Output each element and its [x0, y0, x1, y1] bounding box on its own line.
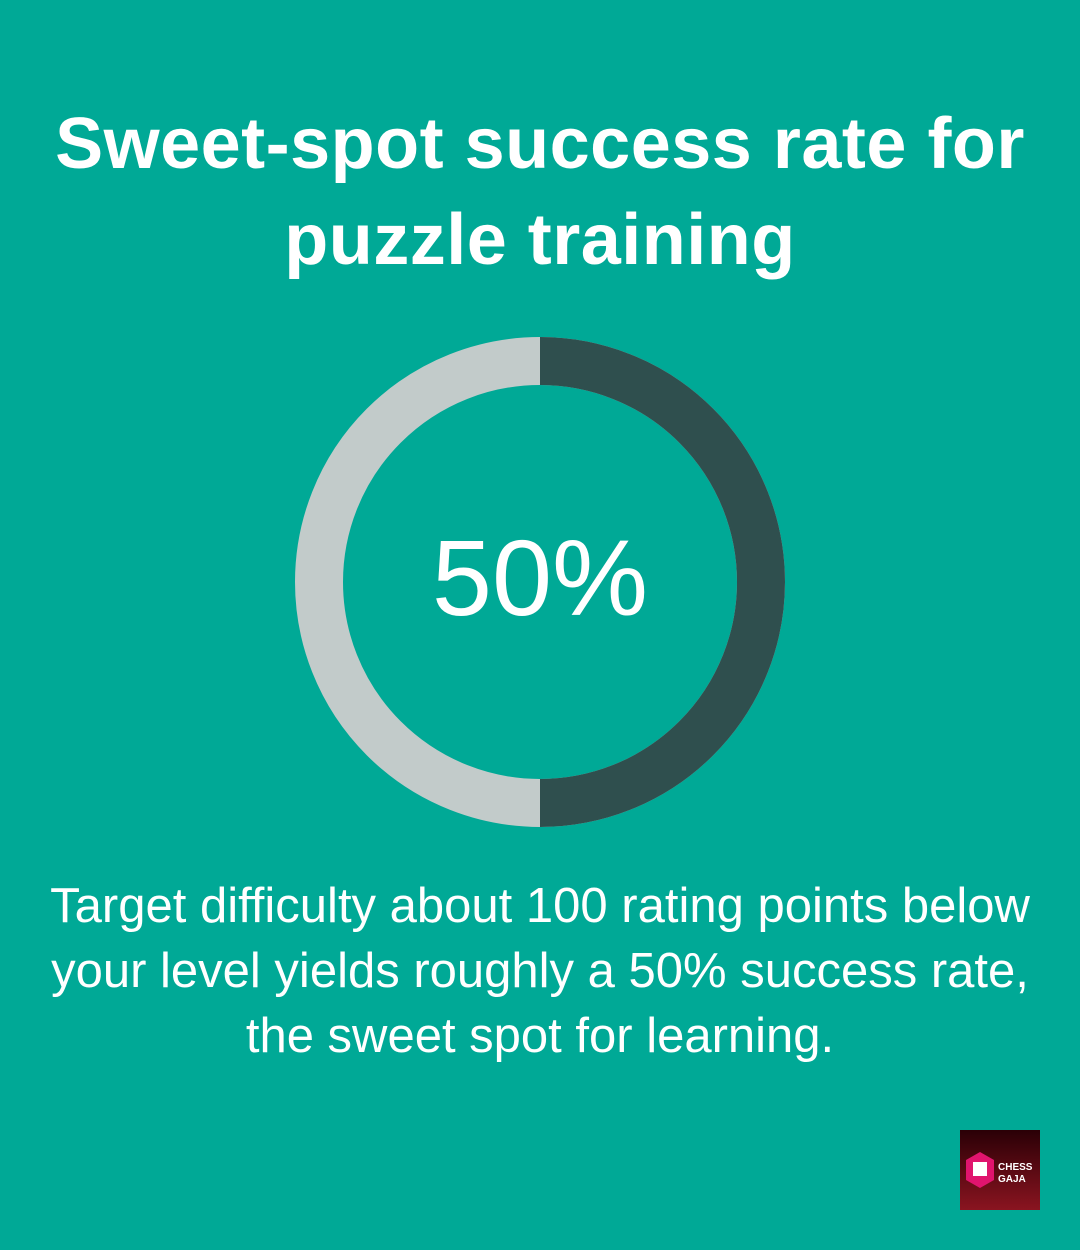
title: Sweet-spot success rate for [55, 104, 1025, 184]
description text: Target difficulty about 100 rating points below [50, 879, 1030, 933]
description text [50, 879, 1030, 1063]
title: puzzle training [284, 200, 796, 280]
title [55, 104, 1025, 280]
logo: CHESS [998, 1162, 1033, 1173]
description text: the sweet spot for learning. [246, 1009, 834, 1063]
donut chart [295, 337, 785, 827]
logo [960, 1130, 1040, 1210]
description text: your level yields roughly a 50% success rate, [51, 944, 1029, 998]
center value: 50% [432, 517, 648, 638]
logo: GAJA [998, 1174, 1026, 1185]
